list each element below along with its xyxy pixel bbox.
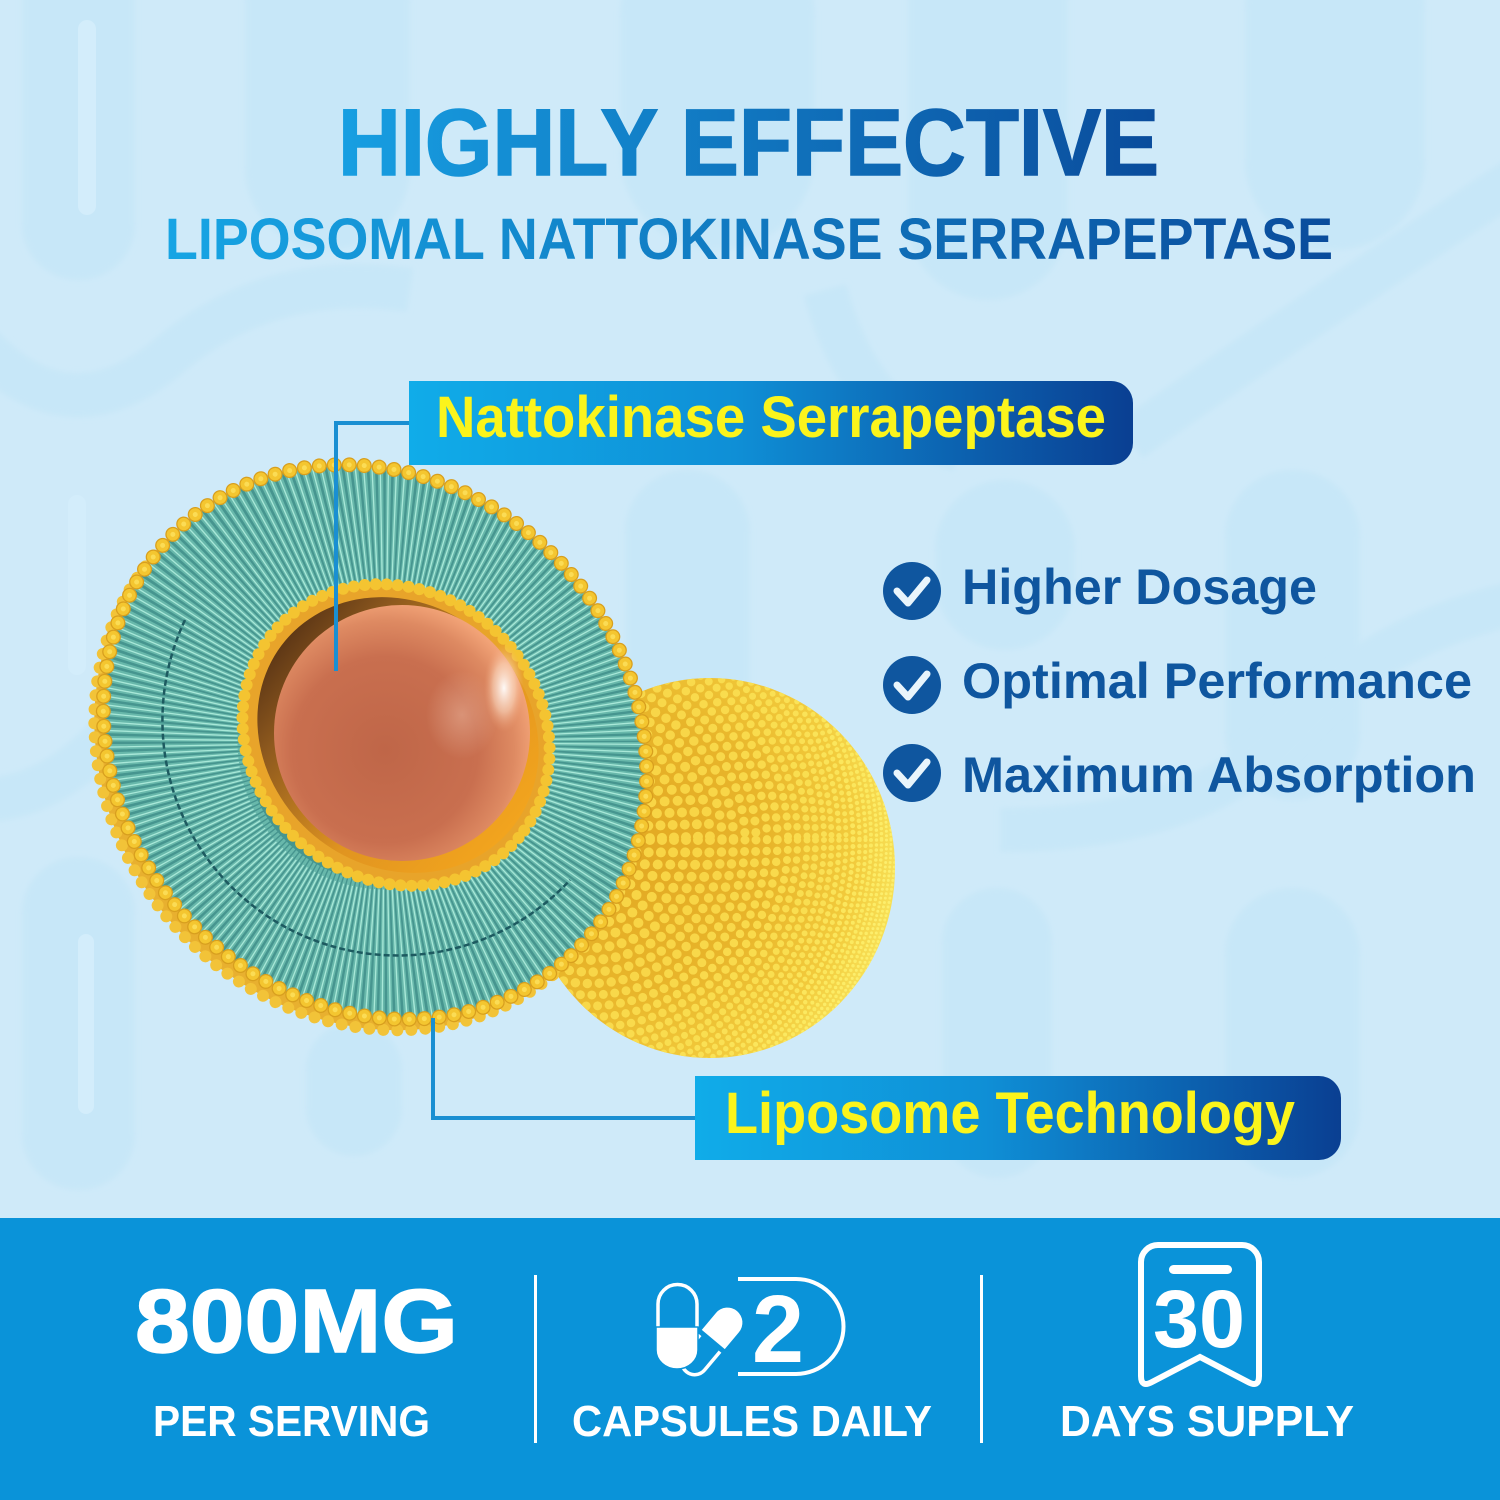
label: nattokinase serrapeptase: Nattokinase Serrapeptase (436, 385, 1106, 450)
orange core (274, 605, 530, 861)
benefit: higher dosage: Higher Dosage (962, 559, 1317, 615)
subtitle: LIPOSOMAL NATTOKINASE SERRAPEPTASE (165, 207, 1333, 272)
label connector lines (336, 423, 696, 1118)
icon: calendar bookmark: 30 (1153, 1274, 1245, 1365)
bottom banner (0, 1218, 1500, 1500)
liposome illustration (88, 457, 895, 1058)
dark arc in the bilayer (162, 620, 570, 955)
stat: 2 capsules daily: CAPSULES DAILY (572, 1397, 932, 1446)
yellow sphere behind the disc (558, 678, 895, 1058)
stat: 2 capsules daily (572, 1276, 932, 1446)
icon: capsules: 2 (752, 1276, 804, 1383)
disc back shell (0, 365, 750, 1141)
icon: calendar bookmark (1141, 1245, 1259, 1384)
teal lipid tails (104, 465, 646, 1019)
label: liposome technology: Liposome Technology (725, 1081, 1295, 1146)
stat: 800mg per serving: PER SERVING (153, 1397, 430, 1446)
stat: 800mg per serving (135, 1272, 458, 1446)
stat: 30 days supply (1060, 1245, 1354, 1446)
benefit: maximum absorption: Maximum Absorption (962, 747, 1476, 803)
title: HIGHLY EFFECTIVE (338, 90, 1159, 196)
outer rim of yellow heads (0, 354, 759, 1130)
inner cavity (201, 540, 595, 930)
inner ring of yellow heads (181, 522, 611, 948)
icon: capsules (656, 1276, 844, 1383)
stat: 30 days supply: DAYS SUPPLY (1060, 1397, 1354, 1446)
stat: 800mg per serving: 800MG (135, 1272, 458, 1372)
benefit: optimal performance: Optimal Performance (962, 653, 1472, 709)
